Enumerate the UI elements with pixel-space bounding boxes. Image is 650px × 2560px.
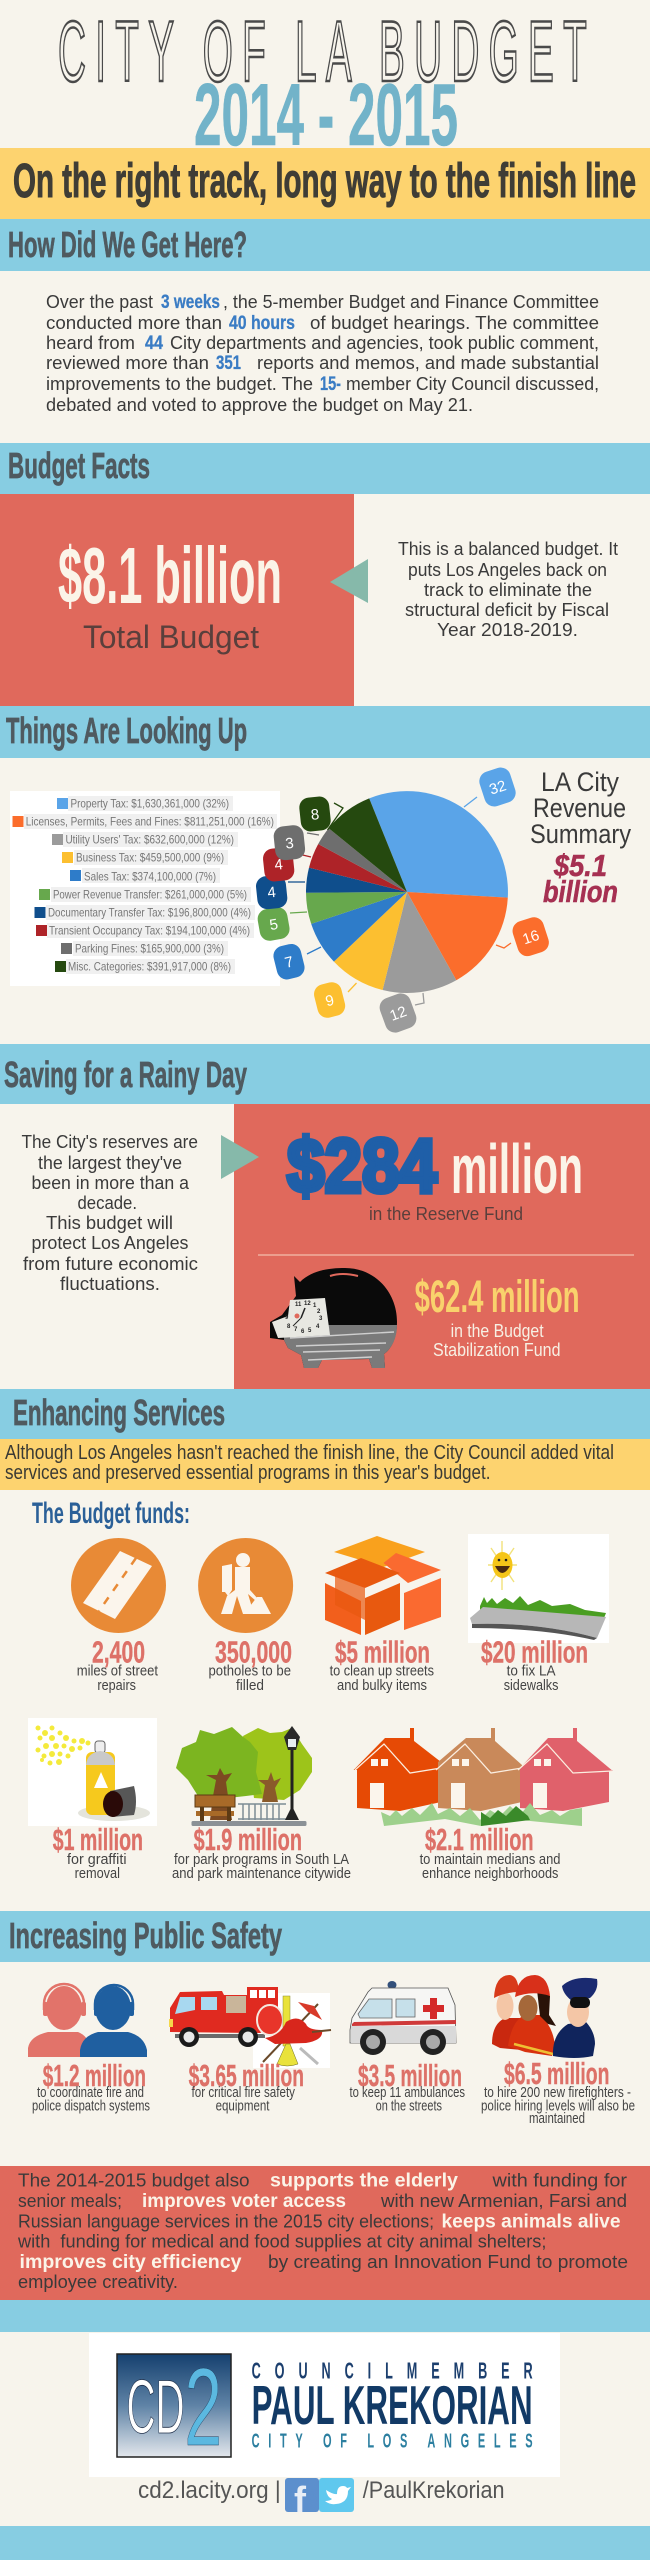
pie callouts: slice percentages: 16 <box>520 927 542 948</box>
stat: street repairs: miles of street <box>77 1663 159 1680</box>
stat: clean up streets: to clean up streets <box>330 1663 434 1680</box>
text block: how we got here: 351 <box>216 353 241 374</box>
pie callouts: slice percentages: 4 <box>274 856 284 874</box>
heading: The Budget funds: The Budget funds: <box>32 1497 190 1530</box>
text block: reserves: decade. <box>78 1193 137 1213</box>
text: LA City Revenue Summary: Revenue <box>533 793 626 823</box>
text: City of Los Angeles: CITY OF LOS ANGELES <box>252 2430 533 2453</box>
arrow: budget facts pointer <box>330 559 368 603</box>
icon: spray can <box>28 1718 157 1826</box>
section header: Budget Facts: Budget Facts <box>8 445 150 486</box>
stat: firefighters: maintained <box>529 2110 585 2127</box>
text: LA City Revenue Summary <box>530 767 631 849</box>
icon: piggy bank with clock <box>270 1268 397 1368</box>
panel: additional budget items: with funding for <box>491 2171 627 2191</box>
legend: revenue categories: Property Tax: $1,630,361,000 (32%) <box>70 796 229 810</box>
text block: how we got here: reports and memos, and made substantial <box>257 353 599 373</box>
text block: how we got here <box>46 292 599 415</box>
stat: park programs: for park programs in South LA <box>174 1851 349 1868</box>
text block: balanced budget: Year 2018-2019. <box>437 620 578 640</box>
pie callouts: slice percentages: 32 <box>487 777 508 799</box>
footer: website: cd2.lacity.org | <box>138 2477 281 2504</box>
text block: balanced budget: puts Los Angeles back on <box>408 560 607 580</box>
text block: how we got here: 3 weeks <box>161 292 220 313</box>
icon: ambulance <box>350 1981 456 2055</box>
label: stabilization fund: Stabilization Fund <box>433 1340 560 1360</box>
icon: piggy bank with clock: 4 <box>316 1324 320 1330</box>
text block: how we got here: debated and voted to approve the budget on May 21. <box>46 395 473 415</box>
stat: potholes: 350,000 <box>215 1635 292 1670</box>
stat: street repairs: 2,400 <box>92 1635 145 1670</box>
text block: how we got here: 15- <box>320 374 341 395</box>
pie callouts: slice percentages: 3 <box>284 835 295 853</box>
legend: revenue categories: Business Tax: $459,500,000 (9%) <box>76 850 224 864</box>
icon: road <box>71 1538 166 1633</box>
pie callouts: slice percentages <box>255 765 551 1035</box>
footer: social handle: /PaulKrekorian <box>363 2477 504 2504</box>
icon: CD2 badge <box>117 2346 231 2469</box>
icon: piggy bank with clock: 7 <box>294 1327 298 1333</box>
pie callouts: slice percentages: 9 <box>324 992 336 1010</box>
stat: ambulances: to keep 11 ambulances <box>350 2084 465 2101</box>
legend: revenue categories: Misc. Categories: $391,917,000 (8%) <box>68 960 231 974</box>
text: LA City Revenue Summary: Summary <box>530 819 631 849</box>
stat: ambulances: $3.5 million <box>358 2058 462 2093</box>
stat: dispatch systems: $1.2 million <box>43 2058 146 2093</box>
text block: balanced budget <box>398 539 618 640</box>
stat: total budget amount: $8.1 billion <box>58 531 282 620</box>
panel: additional budget items: employee creativity. <box>18 2272 178 2292</box>
title: City of LA Budget: CITY OF LA BUDGET <box>58 5 587 100</box>
stat: medians and neighborhoods: enhance neighborhoods <box>422 1865 558 1882</box>
panel: reserve funds <box>234 1104 650 1389</box>
panel: additional budget items: improves voter access <box>142 2191 346 2212</box>
icon: dispatchers with headsets <box>28 1984 147 2057</box>
stat: potholes: filled <box>236 1677 264 1694</box>
icon: facebook: f <box>294 2479 307 2520</box>
text block: how we got here: heard from <box>46 333 135 353</box>
legend: revenue categories: Sales Tax: $374,100,000 (7%) <box>84 870 216 884</box>
section header: Saving for a Rainy Day: Saving for a Rainy Day <box>4 1054 247 1095</box>
icon: three houses <box>354 1728 613 1826</box>
icon: piggy bank with clock: 1 <box>313 1303 317 1309</box>
text block: how we got here: , the 5-member Budget and Finance Committee <box>223 292 599 312</box>
text block: reserves: This budget will <box>46 1213 173 1233</box>
icon: worker filling pothole <box>198 1538 293 1633</box>
pie callouts: slice percentages: 4 <box>267 884 277 902</box>
stat: dispatch systems <box>32 2058 150 2115</box>
pie callouts: slice percentages: 12 <box>388 1003 409 1025</box>
panel: additional budget items: senior meals; <box>18 2191 122 2211</box>
stat: dispatch systems: police dispatch systems <box>32 2098 150 2115</box>
text block: reserves: the largest they've <box>38 1153 182 1173</box>
panel: additional budget items: with new Armenian, Farsi and <box>380 2191 627 2211</box>
icon: piggy bank with clock: 3 <box>319 1316 323 1322</box>
icon: CD2 badge: CD <box>126 2365 184 2450</box>
text: LA City Revenue Summary: LA City <box>541 767 619 797</box>
section header: Enhancing Services <box>0 1389 650 1439</box>
icon: sidewalk and sun <box>468 1534 609 1643</box>
panel: additional budget items: The 2014-2015 budget also <box>18 2171 250 2191</box>
text block: how we got here: 40 hours <box>229 313 295 334</box>
stat: park programs: $1.9 million <box>194 1822 302 1857</box>
icon: piggy bank with clock: 12 <box>304 1301 311 1307</box>
stat: potholes <box>208 1635 292 1694</box>
section header: Saving for a Rainy Day <box>0 1044 650 1104</box>
section header: Budget Facts <box>0 443 650 494</box>
text block: reserves: The City's reserves are <box>22 1132 198 1152</box>
icon: piggy bank with clock: 9 <box>285 1315 289 1321</box>
legend: revenue categories: Licenses, Permits, Fees and Fines: $811,251,000 (16%) <box>26 814 274 828</box>
text block: reserves <box>22 1132 198 1294</box>
text block: balanced budget: structural deficit by Fiscal <box>405 600 609 620</box>
icon: facebook <box>285 2478 319 2520</box>
stat: fire safety equipment <box>189 2058 304 2115</box>
legend: revenue categories: Transient Occupancy Tax: $194,100,000 (4%) <box>49 924 250 938</box>
stat: graffiti removal: for graffiti <box>67 1851 126 1868</box>
section header: Enhancing Services: Enhancing Services <box>13 1392 225 1433</box>
stat: medians and neighborhoods <box>420 1822 560 1882</box>
stat: revenue total <box>543 848 618 909</box>
panel: additional budget items: with funding for medical and food supplies at city animal shelters; <box>17 2232 546 2252</box>
stat: medians and neighborhoods: $2.1 million <box>425 1822 534 1857</box>
stat: park programs <box>172 1822 351 1882</box>
panel: additional budget items: Russian language services in the 2015 city elections; <box>18 2212 434 2232</box>
pie callouts: slice percentages: 8 <box>310 806 320 824</box>
stat: sidewalks: sidewalks <box>504 1677 558 1694</box>
legend: revenue categories: Utility Users' Tax: $632,600,000 (12%) <box>66 832 234 846</box>
stat: graffiti removal <box>53 1822 143 1882</box>
legend: revenue categories: Documentary Transfer Tax: $196,800,000 (4%) <box>48 906 251 920</box>
icon: park with trees, bench and lamp <box>176 1726 312 1826</box>
text block: how we got here: Over the past <box>46 292 153 312</box>
icon: piggy bank with clock: 2 <box>317 1309 321 1315</box>
text block: reserves: fluctuations. <box>60 1274 160 1294</box>
text block: how we got here: member City Council discussed, <box>346 374 599 394</box>
panel: total budget <box>0 494 354 706</box>
icon: piggy bank with clock: 8 <box>287 1324 291 1330</box>
stat: ambulances: on the streets <box>376 2098 442 2115</box>
text block: balanced budget: This is a balanced budget. It <box>398 539 618 559</box>
stat: street repairs: repairs <box>97 1677 136 1694</box>
icon: CD2 badge: 2 <box>184 2346 222 2469</box>
legend: revenue categories: Power Revenue Transfer: $261,000,000 (5%) <box>53 888 247 902</box>
stat: fire safety equipment: $3.65 million <box>189 2058 304 2093</box>
stat: dispatch systems: to coordinate fire and <box>37 2084 144 2101</box>
label: stabilization fund: in the Budget <box>451 1321 544 1341</box>
stat: sidewalks: $20 million <box>481 1635 588 1670</box>
stat: fire safety equipment: for critical fire safety <box>192 2084 295 2101</box>
text block: how we got here: of budget hearings. The committee <box>310 313 599 333</box>
stat: clean up streets: and bulky items <box>337 1677 427 1694</box>
stat: fire safety equipment: equipment <box>216 2098 270 2115</box>
pie callouts: slice percentages: 5 <box>268 916 279 934</box>
stat: clean up streets <box>330 1635 434 1694</box>
legend: revenue categories <box>10 791 280 986</box>
panel: additional budget items: keeps animals alive <box>442 2212 620 2233</box>
banner: enhancing services intro: services and preserved essential programs in this year's budget. <box>5 1462 490 1484</box>
section header: Increasing Public Safety <box>0 1911 650 1962</box>
arrow: reserves pointer <box>221 1135 259 1179</box>
section header: Things Are Looking Up: Things Are Looking Up <box>6 710 247 751</box>
text block: reserves: protect Los Angeles <box>32 1233 188 1253</box>
icon: boxes <box>325 1536 441 1635</box>
text block: reserves: been in more than a <box>32 1173 190 1193</box>
stat: sidewalks <box>481 1635 588 1694</box>
legend: revenue categories: Parking Fines: $165,900,000 (3%) <box>75 942 224 956</box>
title: year range: 2014 - 2015 <box>194 65 458 164</box>
stat: graffiti removal: $1 million <box>53 1822 143 1857</box>
text block: reserves: from future economic <box>23 1254 198 1274</box>
section header: How Did We Get Here: How Did We Get Here? <box>8 224 247 265</box>
section header: Things Are Looking Up <box>0 706 650 758</box>
text block: how we got here: City departments and agencies, took public comment, <box>170 333 599 353</box>
icon: fire truck and equipment <box>169 1987 331 2068</box>
text block: how we got here: conducted more than <box>46 313 222 333</box>
stat: clean up streets: $5 million <box>335 1635 430 1670</box>
stat: street repairs <box>77 1635 159 1694</box>
icon: piggy bank with clock: 11 <box>295 1302 302 1308</box>
icon: piggy bank with clock: 5 <box>308 1328 312 1334</box>
stat: medians and neighborhoods: to maintain medians and <box>420 1851 560 1868</box>
label: stabilization fund <box>433 1321 560 1360</box>
panel: additional budget items: by creating an Innovation Fund to promote <box>268 2252 628 2272</box>
stat: ambulances <box>350 2058 465 2115</box>
text: Councilmember: COUNCILMEMBER <box>252 2357 533 2383</box>
section header: Increasing Public Safety: Increasing Public Safety <box>9 1915 282 1956</box>
stat: revenue total: $5.1 <box>553 848 607 883</box>
panel: additional budget items: supports the elderly <box>270 2171 458 2192</box>
stat: park programs: and park maintenance citywide <box>172 1865 351 1882</box>
pie chart: revenue summary <box>306 791 508 993</box>
icon: twitter <box>319 2478 354 2512</box>
label: reserve fund: in the Reserve Fund <box>369 1204 523 1224</box>
stat: reserve fund amount <box>287 1124 583 1209</box>
stat: sidewalks: to fix LA <box>507 1663 556 1680</box>
panel: additional budget items <box>0 2166 650 2300</box>
text block: how we got here: 44 <box>145 333 163 354</box>
banner: enhancing services intro <box>0 1439 650 1490</box>
icon: piggy bank with clock: 6 <box>301 1329 305 1335</box>
section header: How Did We Get Here <box>0 219 650 271</box>
pie callouts: slice percentages: 7 <box>283 953 295 972</box>
stat: graffiti removal: removal <box>75 1865 120 1882</box>
panel: additional budget items: improves city efficiency <box>20 2252 242 2273</box>
stat: firefighters <box>481 2056 635 2127</box>
text block: balanced budget: track to eliminate the <box>424 580 592 600</box>
stat: potholes: potholes to be <box>208 1663 291 1680</box>
icon: firefighters and police officer <box>492 1975 597 2058</box>
stat: reserve fund amount: $284 <box>287 1124 437 1209</box>
logo: Councilmember Paul Krekorian <box>89 2333 560 2477</box>
text block: how we got here: improvements to the budget. The <box>46 374 313 394</box>
stat: revenue total: billion <box>543 874 618 909</box>
label: total budget: Total Budget <box>83 619 259 655</box>
text block: how we got here: reviewed more than <box>46 353 209 373</box>
